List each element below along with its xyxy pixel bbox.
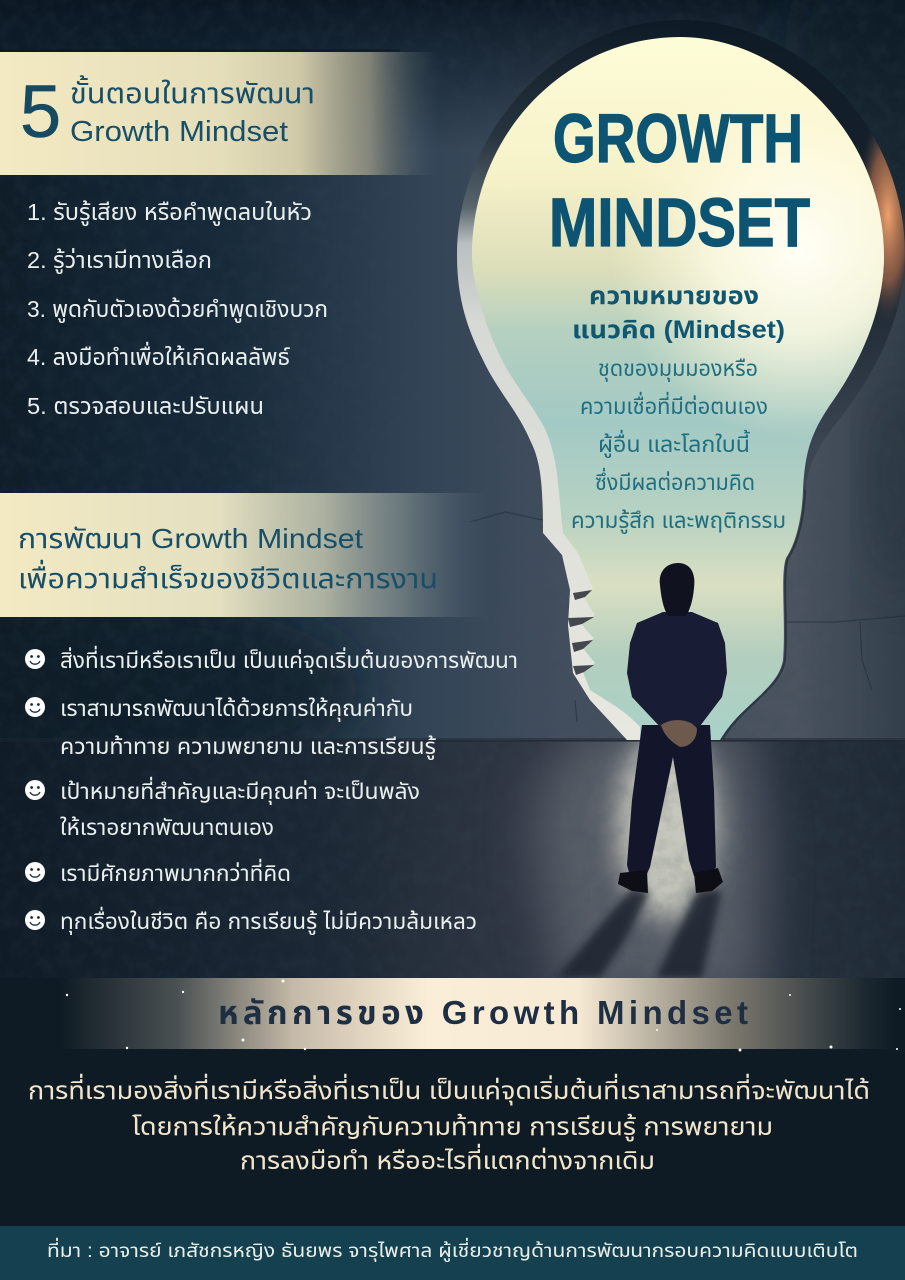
bulb right rim bbox=[680, 20, 905, 490]
bullet text bbox=[60, 645, 518, 935]
text block: principles paragraph: การลงมือทำ หรืออะไรที่แตกต่างจากเดิม bbox=[240, 1143, 655, 1175]
list: five steps: 1. รับรู้เสียง หรือคำพูดลบในหัว bbox=[27, 199, 312, 227]
text block: principles paragraph: การที่เรามองสิ่งที่เรามีหรือสิ่งที่เราเป็น เป็นแค่จุดเริ่มต้นที่เราสามารถที่จะพัฒนาได้ bbox=[28, 1073, 870, 1106]
footer: source: ที่มา : อาจารย์ เภสัชกรหญิง ธันยพร จารุไพศาล ผู้เชี่ยวชาญด้านการพัฒนากรอบความคิดแบบเติบโต bbox=[47, 1237, 858, 1263]
text block: principles paragraph bbox=[28, 1073, 870, 1175]
footer: source bbox=[0, 1226, 905, 1280]
panel: principles background bbox=[0, 978, 905, 1226]
man: jacket bbox=[627, 612, 727, 730]
list: five steps: 4. ลงมือทำเพื่อให้เกิดผลลัพธ์ bbox=[27, 341, 290, 370]
list: five steps bbox=[27, 199, 328, 419]
man: hands bbox=[661, 720, 697, 747]
banner heading: หลักการของ Growth Mindset bbox=[218, 994, 748, 1031]
orange glow bbox=[864, 134, 905, 314]
man's shadows on the floor bbox=[556, 888, 722, 978]
bullet text: ให้เราอยากพัฒนาตนเอง bbox=[60, 815, 274, 840]
rim teeth bbox=[568, 590, 594, 675]
bullet text: ความท้าทาย ความพยายาม และการเรียนรู้ bbox=[60, 734, 436, 760]
list: five steps: 5. ตรวจสอบและปรับแผน bbox=[27, 393, 264, 419]
bullet text: ทุกเรื่องในชีวิต คือ การเรียนรู้ ไม่มีความล้มเหลว bbox=[60, 906, 477, 935]
list: smiley bullets bbox=[25, 645, 518, 935]
definition body: ซึ่งมีผลต่อความคิด bbox=[595, 467, 755, 495]
definition body: ชุดของมุมมองหรือ bbox=[598, 356, 758, 382]
background: floor bbox=[0, 738, 905, 978]
list: five steps: 2. รู้ว่าเรามีทางเลือก bbox=[27, 247, 212, 275]
banner: developing growth mindset bbox=[0, 493, 490, 617]
bullet text: เราสามารถพัฒนาได้ด้วยการให้คุณค่ากับ bbox=[60, 696, 413, 722]
definition heading bbox=[572, 282, 785, 344]
bulb left rim bbox=[457, 20, 690, 740]
title: GROWTH bbox=[553, 100, 803, 177]
definition body bbox=[571, 356, 786, 534]
definition body: ความเชื่อที่มีต่อตนเอง bbox=[580, 391, 768, 419]
edge shadow on the right bbox=[722, 490, 805, 740]
bullet text: เป้าหมายที่สำคัญและมีคุณค่า จะเป็นพลัง bbox=[60, 776, 420, 805]
banner: 5 steps bbox=[0, 49, 440, 175]
banner heading: ขั้นตอนในการพัฒนา bbox=[70, 75, 315, 110]
bullet text: สิ่งที่เรามีหรือเราเป็น เป็นแค่จุดเริ่มต้นของการพัฒนา bbox=[60, 645, 518, 674]
title: MINDSET bbox=[549, 184, 810, 261]
definition body: ผู้อื่น และโลกใบนี้ bbox=[598, 429, 750, 458]
banner heading: Growth Mindset bbox=[70, 116, 288, 148]
bulb light bbox=[472, 37, 884, 740]
banner heading: เพื่อความสำเร็จของชีวิตและการงาน bbox=[18, 559, 438, 594]
man: legs bbox=[627, 725, 716, 876]
list: five steps: 3. พูดกับตัวเองด้วยคำพูดเชิงบวก bbox=[27, 296, 328, 324]
definition heading: ความหมายของ bbox=[589, 282, 759, 310]
background: concrete wall bbox=[0, 0, 905, 780]
definition heading: แนวคิด (Mindset) bbox=[572, 316, 785, 344]
text block: mindset definition bbox=[571, 282, 786, 534]
man standing from behind bbox=[618, 563, 727, 893]
title bbox=[549, 100, 810, 261]
man: shoes bbox=[618, 868, 723, 893]
banner heading bbox=[70, 75, 315, 148]
banner heading: การพัฒนา Growth Mindset bbox=[18, 523, 363, 554]
banner heading bbox=[18, 523, 438, 594]
sun glow inside bulb bbox=[638, 80, 884, 428]
panel: bulb-shaped opening bbox=[457, 20, 905, 740]
numeral 5: 5 bbox=[20, 70, 61, 153]
definition body: ความรู้สึก และพฤติกรรม bbox=[571, 508, 786, 534]
text block: principles paragraph: โดยการให้ความสำคัญกับความท้าทาย การเรียนรู้ การพยายาม bbox=[132, 1113, 773, 1142]
man: head bbox=[660, 563, 694, 616]
sparkle dots bbox=[66, 980, 901, 1052]
icon: smiley bullets bbox=[25, 649, 45, 930]
bullet text: เรามีศักยภาพมากกว่าที่คิด bbox=[60, 858, 291, 886]
banner: principles of growth mindset bbox=[60, 978, 901, 1052]
